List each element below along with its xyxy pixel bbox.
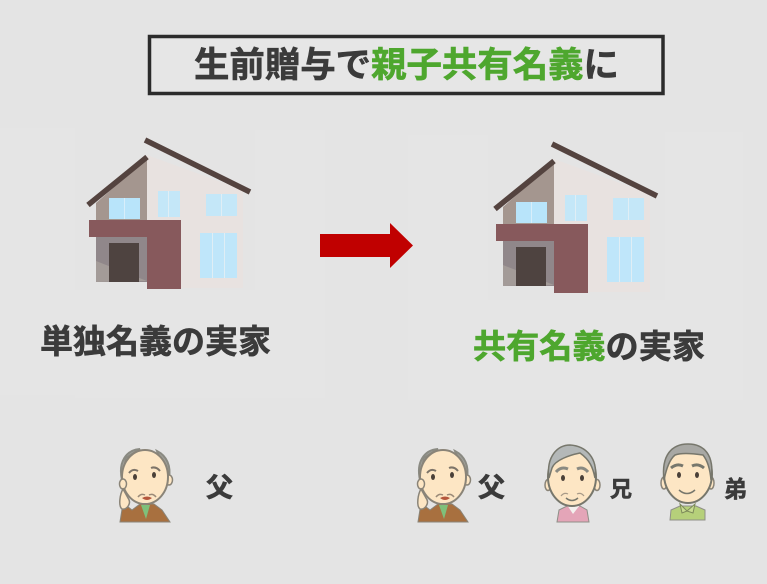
icon: elder brother xyxy=(545,445,600,522)
label: father (right): 父 xyxy=(478,473,505,503)
icon: father (left) xyxy=(120,449,172,522)
icon: younger brother xyxy=(661,444,714,520)
icon: father (right) xyxy=(418,449,470,522)
label: elder brother: 兄 xyxy=(610,477,632,502)
label: younger brother: 弟 xyxy=(724,476,747,502)
title box xyxy=(150,36,663,94)
icon: single-owner house xyxy=(88,140,250,289)
label: single-owner home: 単独名義の実家 xyxy=(40,323,271,360)
label: father (left): 父 xyxy=(206,473,233,503)
icon: co-owned house xyxy=(495,144,657,293)
arrow xyxy=(320,223,413,268)
title text: 生前贈与で親子共有名義に xyxy=(194,46,619,85)
label: co-owned home: 共有名義の実家 xyxy=(473,328,705,365)
